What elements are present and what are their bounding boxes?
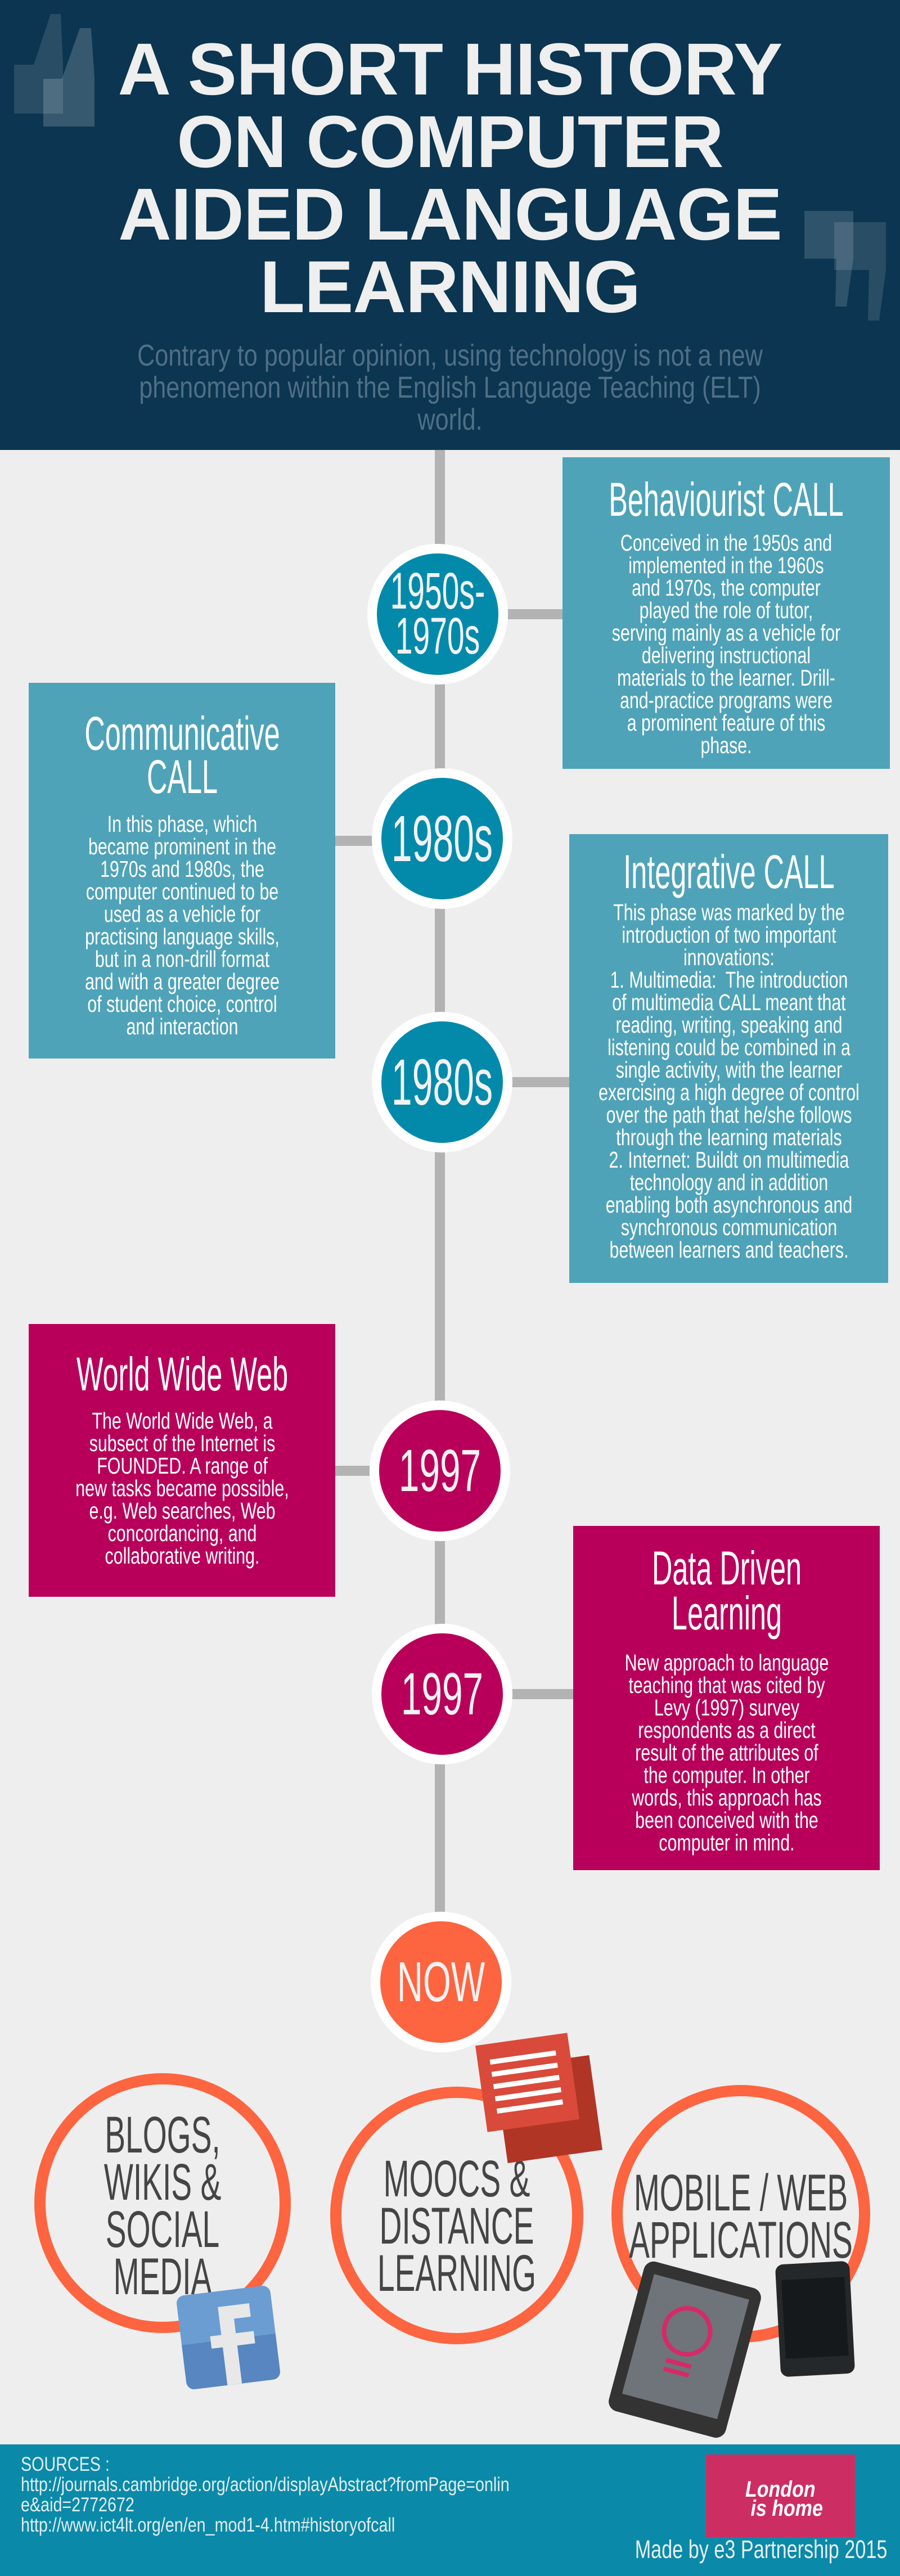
- text: behaviourist description: a prominent feature of this: [627, 710, 825, 736]
- timeline vertical line: [435, 450, 445, 1935]
- ring: blogs wikis social media: [34, 2073, 291, 2333]
- text: integrative description: reading, writing, speaking and: [615, 1012, 842, 1038]
- text: integrative description: of multimedia CALL meant that: [612, 989, 845, 1015]
- text: moocs & distance learning: LEARNING: [377, 2245, 536, 2302]
- text: www description: new tasks became possible,: [75, 1475, 289, 1501]
- marker: 1997 (second): [372, 1624, 512, 1764]
- text: data driven description: words, this approach has: [632, 1785, 821, 1811]
- text: integrative description: through the learning materials: [616, 1124, 842, 1150]
- heading: Data Driven Learning: Data Driven: [651, 1542, 802, 1595]
- text: www description: collaborative writing.: [105, 1543, 259, 1569]
- connector bars: [495, 609, 565, 619]
- text: data driven description: computer in mind.: [659, 1830, 794, 1856]
- text: integrative description: introduction of two important: [622, 922, 836, 948]
- text: behaviourist description: delivering instructional: [642, 642, 811, 668]
- text: behaviourist description: Conceived in the 1950s and: [620, 530, 832, 556]
- text: mobile / web applications: APPLICATIONS: [629, 2212, 853, 2269]
- text: www description: concordancing, and: [107, 1520, 256, 1546]
- subtitle: [137, 339, 763, 436]
- text: data driven description: teaching that was cited by: [628, 1672, 825, 1698]
- subtitle: phenomenon within the English Language Teaching (ELT): [139, 371, 761, 404]
- marker: NOW: [371, 1912, 511, 2052]
- title: LEARNING: [260, 245, 640, 328]
- marker: 1950s-1970s: 1970s: [395, 607, 480, 665]
- marker: 1980s (second): [372, 1012, 512, 1152]
- panel: Data Driven Learning: [573, 1526, 880, 1870]
- text: made by: Made by e3 Partnership 2015: [634, 2535, 887, 2564]
- logo: london is home: is home: [750, 2496, 823, 2521]
- text: integrative description: exercising a high degree of control: [598, 1079, 859, 1105]
- text: integrative description: 1. Multimedia: The introduction: [610, 967, 848, 993]
- text: data driven description: [624, 1650, 829, 1856]
- icon: phone: [775, 2261, 855, 2377]
- icon: facebook: [176, 2285, 281, 2390]
- marker: 1997 (first): 1997: [399, 1438, 481, 1504]
- text: sources: http://journals.cambridge.org/action/displayAbstract?fromPage=onlin: [21, 2474, 510, 2496]
- heading: Behaviourist CALL: Behaviourist CALL: [609, 473, 844, 526]
- panel: Communicative CALL: [29, 683, 335, 1059]
- ring: mobile / web applications: [611, 2085, 870, 2343]
- text: behaviourist description: serving mainly as a vehicle for: [612, 620, 840, 646]
- text: behaviourist description: [612, 530, 840, 758]
- heading: Communicative CALL: Communicative: [84, 707, 280, 760]
- heading: Communicative CALL: CALL: [146, 750, 218, 803]
- panel: Integrative CALL: [569, 834, 888, 1283]
- text: communicative description: [85, 811, 279, 1039]
- heading: Integrative CALL: Integrative CALL: [623, 845, 834, 898]
- text: communicative description: became prominent in the: [88, 834, 276, 859]
- panel: World Wide Web: [29, 1324, 335, 1597]
- text: behaviourist description: materials to the learner. Drill-: [617, 665, 835, 691]
- heading: Data Driven Learning: Learning: [671, 1587, 782, 1640]
- text: communicative description: practising language skills,: [85, 924, 279, 949]
- text: communicative description: used as a vehicle for: [104, 901, 260, 927]
- text: data driven description: the computer. In other: [644, 1762, 809, 1788]
- text: blogs wikis social media: [104, 2106, 221, 2305]
- text: sources: SOURCES :: [21, 2453, 110, 2475]
- panel: Behaviourist CALL: [562, 457, 890, 769]
- text: www description: The World Wide Web, a: [92, 1408, 272, 1434]
- text: communicative description: of student choice, control: [87, 991, 277, 1017]
- icon: chat bubbles: [475, 2033, 602, 2163]
- marker: 1997 (second): 1997: [401, 1661, 483, 1727]
- logo: london is home: [706, 2455, 855, 2537]
- text: mobile / web applications: [629, 2164, 853, 2269]
- text: communicative description: and with a greater degree: [85, 969, 279, 994]
- title: A SHORT HISTORY: [118, 28, 782, 110]
- icon: tablet: [606, 2259, 763, 2440]
- text: behaviourist description: and-practice programs were: [620, 687, 832, 713]
- text: communicative description: 1970s and 1980s, the: [100, 856, 264, 882]
- marker: 1950s-1970s: 1950s-: [390, 562, 485, 620]
- text: communicative description: and interaction: [126, 1014, 238, 1039]
- text: sources: http://www.ict4lt.org/en/en_mod1-4.htm#historyofcall: [21, 2514, 395, 2536]
- text: www description: [75, 1408, 289, 1569]
- footer: [0, 2444, 900, 2576]
- text: integrative description: technology and in addition: [629, 1169, 828, 1195]
- text: data driven description: been conceived with the: [635, 1807, 818, 1833]
- text: www description: subsect of the Internet is: [89, 1430, 275, 1456]
- text: integrative description: This phase was marked by the: [613, 899, 844, 925]
- text: data driven description: respondents as a direct: [638, 1717, 815, 1743]
- text: behaviourist description: played the role of tutor,: [640, 597, 813, 623]
- text: integrative description: over the path that he/she follows: [606, 1102, 852, 1128]
- marker: NOW: NOW: [397, 1951, 485, 2014]
- text: sources: [21, 2453, 510, 2536]
- text: moocs & distance learning: [377, 2150, 536, 2302]
- text: moocs & distance learning: MOOCS &: [384, 2150, 530, 2208]
- icon: opening quote mark: [14, 14, 94, 127]
- text: communicative description: In this phase, which: [107, 811, 257, 837]
- text: data driven description: result of the attributes of: [635, 1740, 818, 1766]
- text: behaviourist description: and 1970s, the computer: [632, 575, 821, 601]
- text: integrative description: 2. Internet: Buildt on multimedia: [609, 1147, 849, 1173]
- title: AIDED LANGUAGE: [118, 173, 782, 255]
- text: blogs wikis social media: MEDIA: [114, 2248, 212, 2305]
- heading: Data Driven Learning: [651, 1542, 802, 1640]
- text: integrative description: listening could be combined in a: [608, 1034, 850, 1060]
- marker: 1980s (first): [372, 768, 512, 909]
- heading: Communicative CALL: [84, 707, 280, 803]
- text: integrative description: enabling both asynchronous and: [605, 1192, 852, 1218]
- text: moocs & distance learning: DISTANCE: [379, 2197, 534, 2255]
- text: communicative description: computer continued to be: [86, 879, 278, 904]
- text: www description: e.g. Web searches, Web: [89, 1498, 275, 1524]
- text: www description: FOUNDED. A range of: [97, 1453, 267, 1479]
- title: ON COMPUTER: [177, 100, 723, 183]
- text: behaviourist description: implemented in the 1960s: [628, 552, 824, 578]
- logo: london is home: London: [745, 2477, 816, 2502]
- marker: 1980s (first): 1980s: [392, 802, 493, 875]
- marker: 1997 (first): [370, 1400, 510, 1541]
- text: integrative description: between learners and teachers.: [609, 1237, 848, 1263]
- subtitle: world.: [417, 403, 483, 436]
- text: behaviourist description: phase.: [700, 732, 752, 758]
- marker: 1980s (second): 1980s: [392, 1046, 493, 1119]
- icon: closing quote mark: [804, 211, 886, 321]
- heading: World Wide Web: World Wide Web: [76, 1348, 288, 1400]
- text: integrative description: single activity, with the learner: [615, 1057, 842, 1083]
- text: integrative description: innovations:: [683, 944, 774, 970]
- text: blogs wikis social media: BLOGS,: [105, 2106, 220, 2164]
- title: [118, 28, 782, 328]
- text: mobile / web applications: MOBILE / WEB: [634, 2164, 848, 2222]
- text: integrative description: [598, 899, 859, 1263]
- marker: 1950s-1970s: [367, 544, 508, 684]
- text: integrative description: synchronous communication: [620, 1214, 837, 1240]
- text: blogs wikis social media: SOCIAL: [106, 2201, 219, 2258]
- text: blogs wikis social media: WIKIS &: [104, 2154, 221, 2211]
- header band: [0, 0, 900, 450]
- subtitle: Contrary to popular opinion, using technology is not a new: [137, 339, 763, 372]
- ring: moocs & distance learning: [330, 2087, 583, 2344]
- text: data driven description: New approach to language: [624, 1650, 829, 1676]
- text: data driven description: Levy (1997) survey: [654, 1695, 799, 1721]
- text: sources: e&aid=2772672: [21, 2494, 134, 2516]
- text: communicative description: but in a non-drill format: [94, 946, 269, 972]
